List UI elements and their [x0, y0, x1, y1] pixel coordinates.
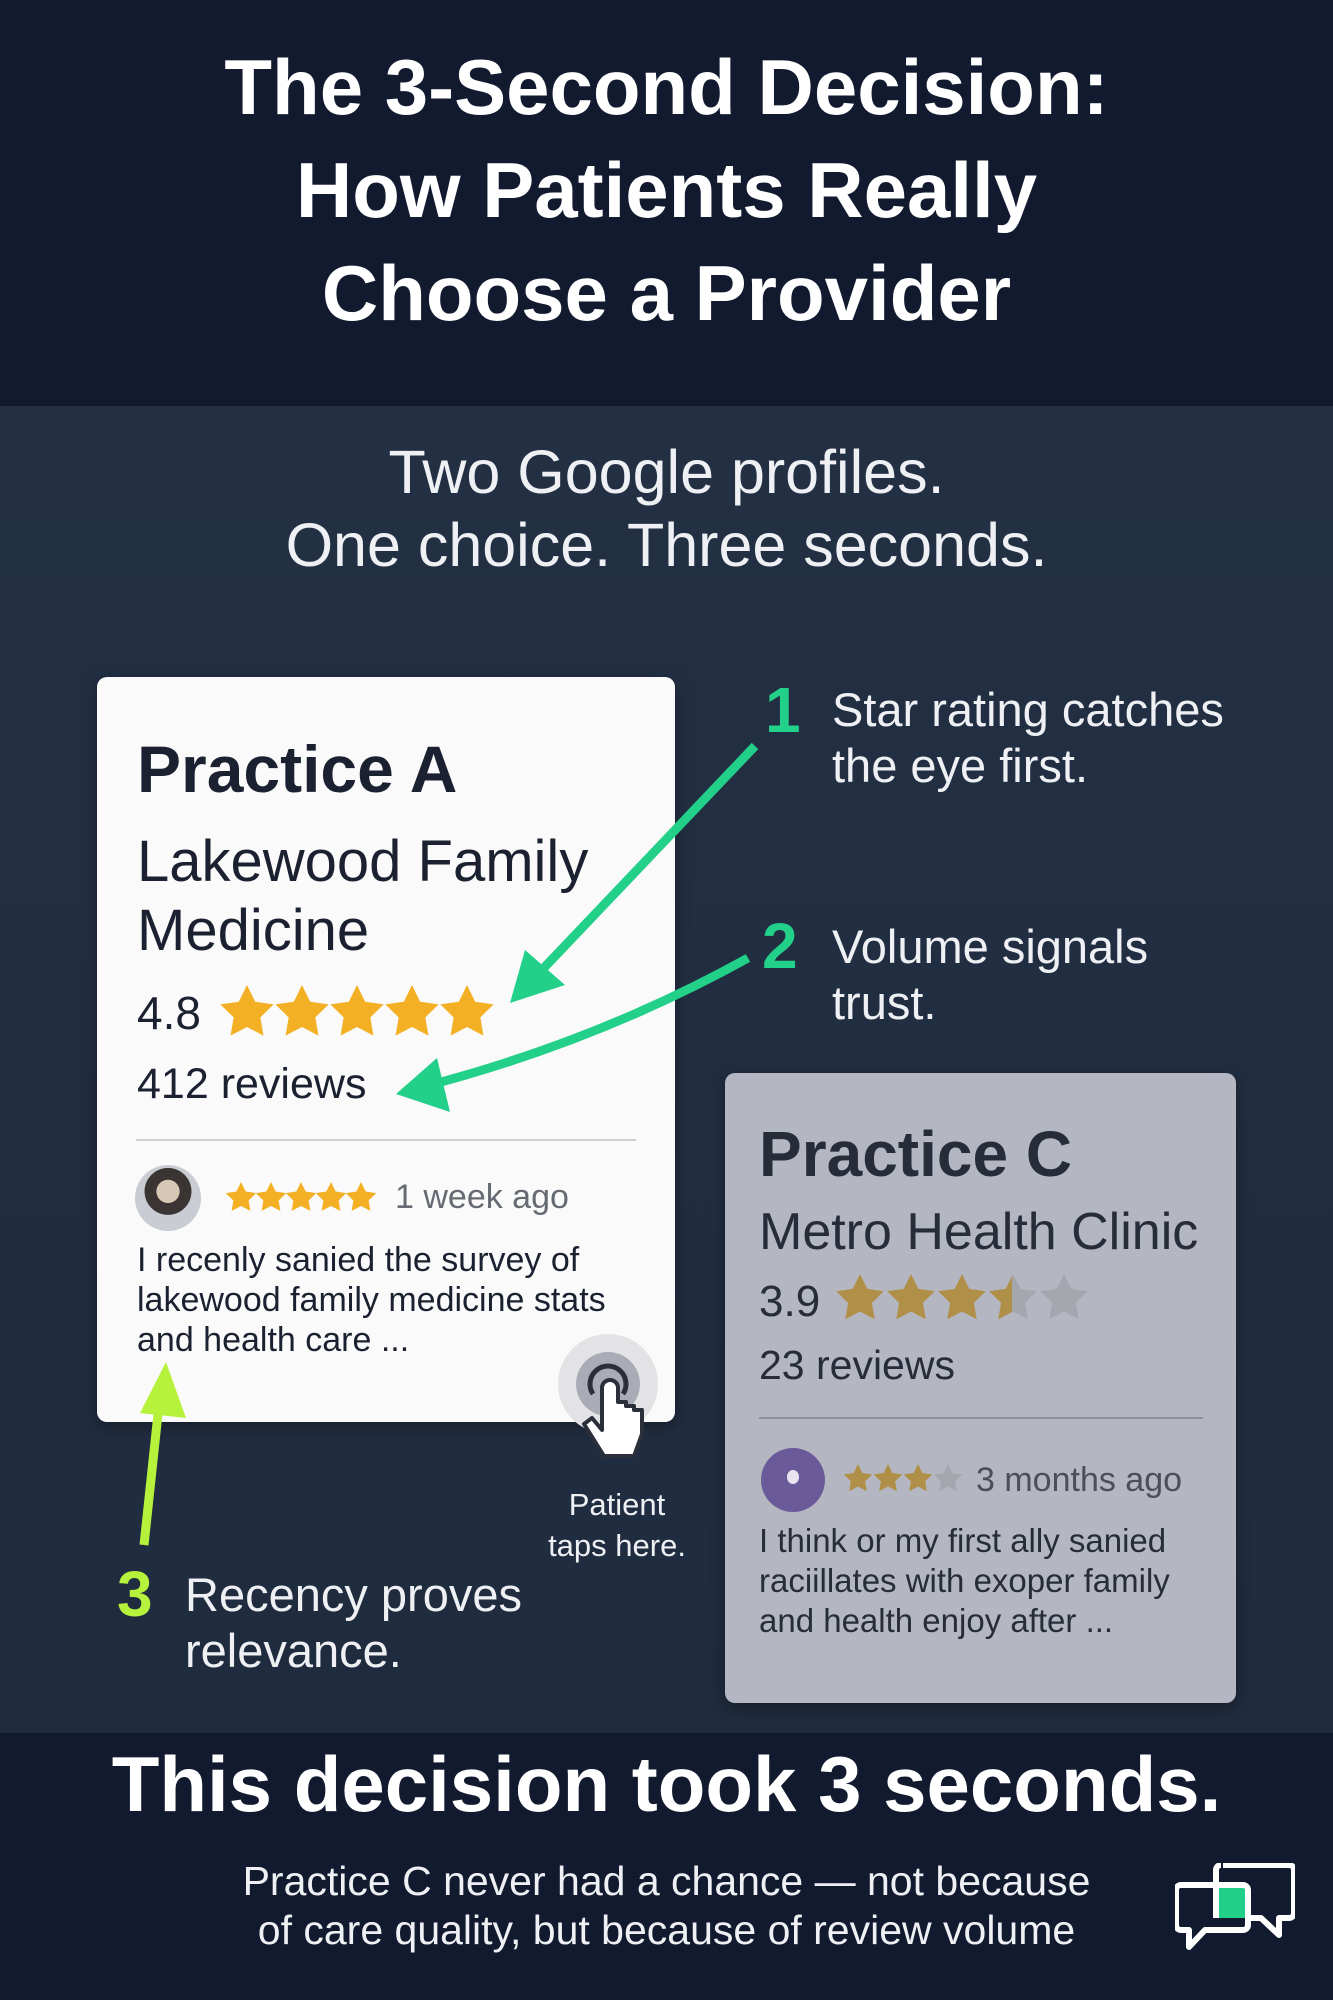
arrow 2: [396, 958, 748, 1112]
icon: chat bubbles: [1175, 1863, 1295, 1950]
review snippet: and health enjoy after ...: [759, 1602, 1113, 1639]
small stars: [226, 1182, 376, 1211]
review count: 23 reviews: [759, 1342, 955, 1388]
bottom text: of care quality, but because of review volume: [258, 1907, 1075, 1953]
panel: Practice A card: [97, 677, 675, 1422]
callout 3: [117, 1558, 522, 1677]
review snippet: raciillates with exoper family: [759, 1562, 1170, 1599]
icon: tap hand: [558, 1334, 658, 1458]
rating: [759, 1274, 1088, 1326]
bottom band: [0, 1733, 1333, 2000]
callout 1: 1: [765, 674, 801, 746]
rating: [137, 985, 494, 1039]
title: [224, 43, 1109, 337]
review snippet: [759, 1448, 1182, 1639]
heading: Practice A: Practice A: [137, 732, 457, 806]
callout 3: relevance.: [185, 1624, 402, 1677]
subtitle: One choice. Three seconds.: [286, 511, 1047, 579]
header band: [0, 0, 1333, 406]
bottom text: Practice C never had a chance — not because: [243, 1858, 1090, 1904]
name: Lakewood Family: [137, 829, 588, 894]
callout 1: Star rating catches: [832, 683, 1224, 736]
title: How Patients Really: [296, 146, 1037, 234]
avatar: [135, 1165, 201, 1231]
name: [137, 829, 588, 963]
tap label: taps here.: [548, 1528, 686, 1563]
callout 2: 2: [762, 910, 798, 982]
callout 1: [765, 674, 1224, 792]
callout 3: 3: [117, 1558, 153, 1630]
heading: Practice C: Practice C: [759, 1118, 1072, 1190]
avatar: [761, 1448, 825, 1512]
review snippet: 1 week ago: [395, 1178, 569, 1216]
rating: 3.9: [759, 1277, 820, 1326]
arrow 1: [510, 746, 755, 1003]
title: Choose a Provider: [322, 249, 1011, 337]
callout 3: Recency proves: [185, 1568, 522, 1621]
bottom text: [243, 1858, 1090, 1953]
callout 2: Volume signals: [832, 920, 1148, 973]
name: Medicine: [137, 898, 369, 963]
review snippet: I recenly sanied the survey of: [137, 1241, 579, 1279]
review snippet: and health care ...: [137, 1321, 409, 1359]
subtitle: [286, 438, 1047, 579]
review snippet: lakewood family medicine stats: [137, 1281, 606, 1319]
title: The 3-Second Decision:: [224, 43, 1109, 131]
tap label: [548, 1487, 686, 1563]
bottom headline: This decision took 3 seconds.: [112, 1740, 1221, 1828]
name: Metro Health Clinic: [759, 1203, 1198, 1261]
callout 1: the eye first.: [832, 739, 1088, 792]
subtitle: Two Google profiles.: [388, 438, 945, 506]
callout 2: trust.: [832, 976, 936, 1029]
review snippet: 3 months ago: [976, 1461, 1182, 1499]
review snippet: I think or my first ally sanied: [759, 1522, 1166, 1559]
rating: 4.8: [137, 987, 201, 1039]
review snippet: [135, 1165, 606, 1359]
tap label: Patient: [569, 1487, 665, 1522]
arrow 3: [140, 1362, 186, 1545]
callout 2: [762, 910, 1148, 1029]
review count: 412 reviews: [137, 1060, 366, 1108]
panel: Practice C card: [725, 1073, 1236, 1703]
middle section: [0, 406, 1333, 1733]
